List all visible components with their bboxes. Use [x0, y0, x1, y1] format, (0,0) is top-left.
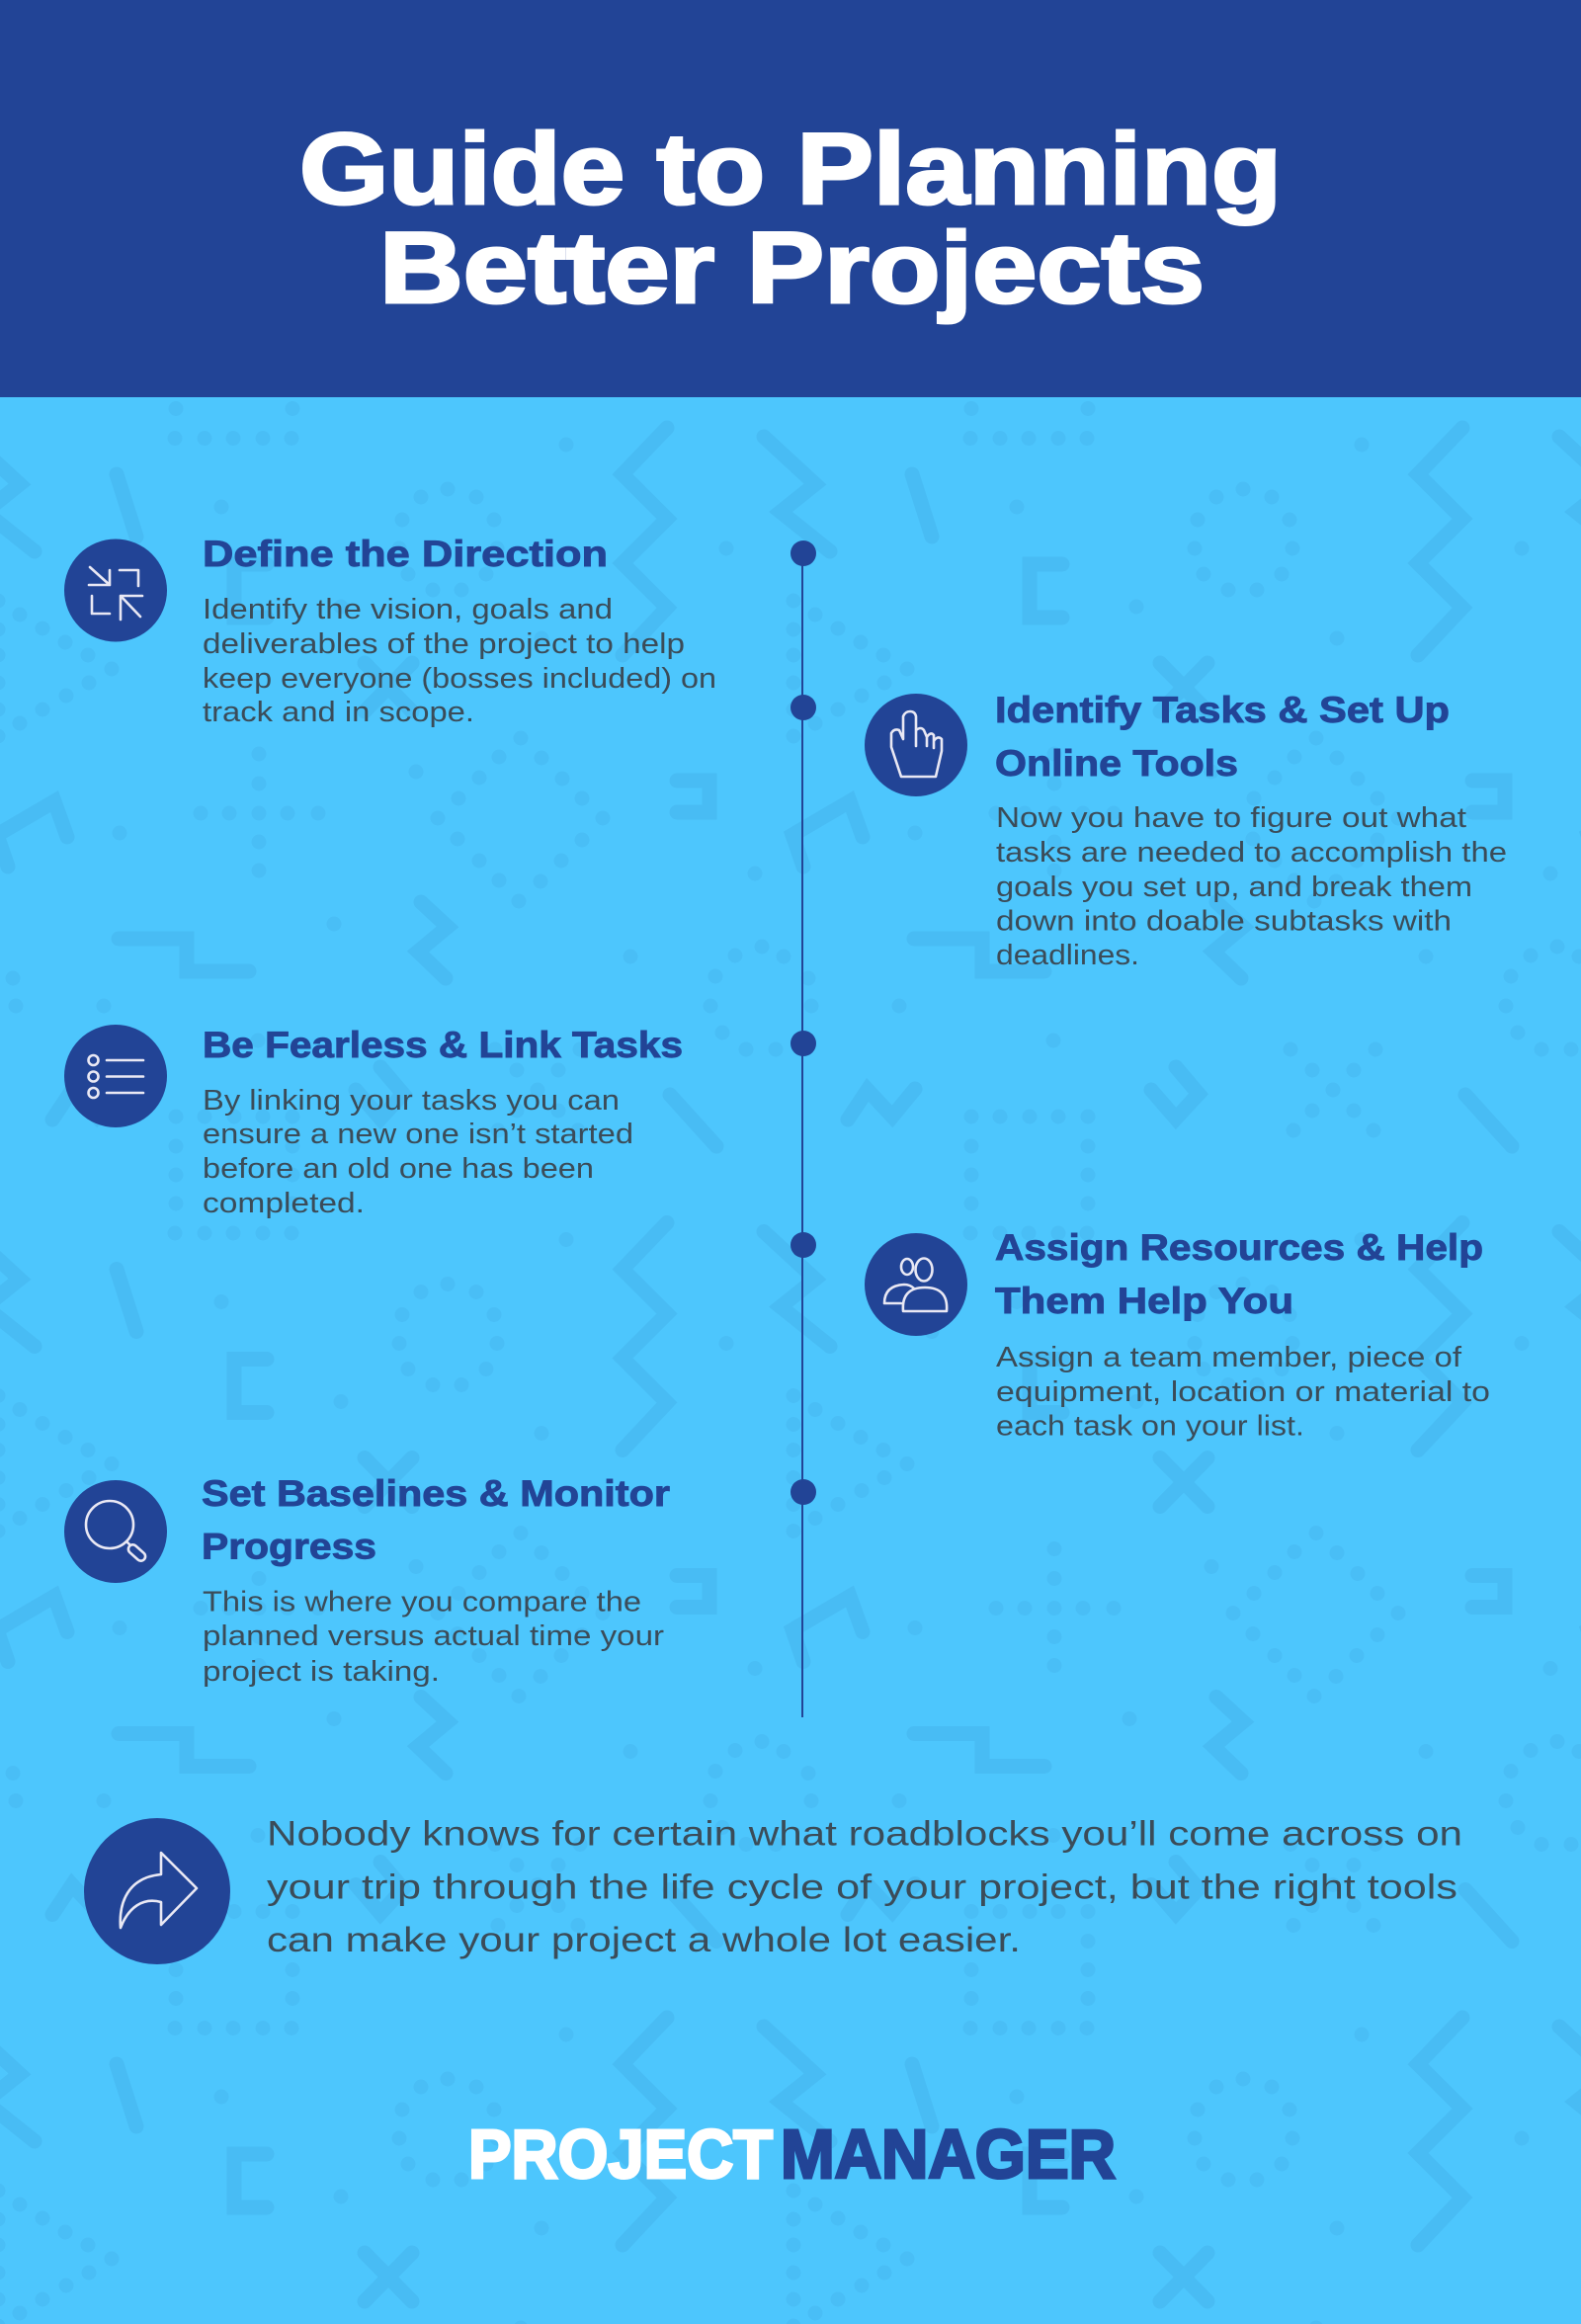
heading: Assign Resources & Help [995, 1227, 1483, 1268]
body text: Now you have to figure out what [996, 802, 1466, 834]
body text: deliverables of the project to help [203, 628, 685, 660]
timeline [790, 540, 816, 1717]
body text [203, 594, 716, 728]
body text [996, 1342, 1490, 1443]
closing text: Nobody knows for certain what roadblocks you’ll come across on [267, 1814, 1462, 1854]
logo [468, 2116, 1116, 2193]
timeline dot 4 [790, 1232, 816, 1258]
heading [995, 690, 1450, 784]
title: Guide to Planning [299, 113, 1282, 225]
body text: equipment, location or material to [996, 1376, 1490, 1408]
body text: track and in scope. [203, 697, 474, 728]
logo: MANAGER [781, 2116, 1116, 2193]
body text: before an old one has been [203, 1153, 594, 1185]
timeline dot 2 [790, 695, 816, 720]
heading: Define the Direction [203, 534, 608, 574]
panel: identify tasks [865, 690, 1507, 971]
heading: Them Help You [995, 1281, 1293, 1321]
heading: Online Tools [995, 743, 1238, 784]
title: Better Projects [379, 211, 1205, 324]
logo: PROJECT [468, 2116, 773, 2193]
title [299, 113, 1282, 324]
closing text [267, 1814, 1462, 1959]
icon: pointing hand [865, 694, 967, 796]
body text: completed. [203, 1188, 365, 1219]
body text: deadlines. [996, 940, 1139, 971]
body text: This is where you compare the [203, 1587, 641, 1618]
timeline dot 5 [790, 1479, 816, 1505]
body text: each task on your list. [996, 1411, 1304, 1443]
body text: Identify the vision, goals and [203, 594, 613, 625]
heading: Progress [202, 1526, 376, 1567]
icon: magnifier [64, 1480, 167, 1583]
body text: goals you set up, and break them [996, 872, 1472, 903]
body text: Assign a team member, piece of [996, 1342, 1462, 1373]
body text: ensure a new one isn’t started [203, 1119, 633, 1150]
panel: assign resources [865, 1227, 1490, 1443]
icon: list [64, 1025, 167, 1127]
body text: down into doable subtasks with [996, 905, 1452, 937]
panel: define the direction [64, 534, 716, 728]
panel: closing message [84, 1814, 1462, 1964]
icon: people [865, 1233, 967, 1336]
body text [996, 802, 1507, 971]
panel: set baselines [64, 1473, 670, 1688]
header band [0, 0, 1581, 397]
timeline dot 1 [790, 540, 816, 566]
icon: share arrow [84, 1818, 230, 1964]
heading [202, 1473, 670, 1567]
body text: planned versus actual time your [203, 1620, 664, 1652]
heading: Identify Tasks & Set Up [995, 690, 1450, 730]
body text [203, 1085, 633, 1219]
body text: tasks are needed to accomplish the [996, 837, 1507, 869]
icon: compress arrows [64, 540, 167, 642]
panel: be fearless [64, 1025, 683, 1219]
heading: Set Baselines & Monitor [202, 1473, 670, 1514]
timeline dot 3 [790, 1031, 816, 1056]
heading: Be Fearless & Link Tasks [203, 1025, 683, 1065]
heading [995, 1227, 1483, 1321]
body text [203, 1587, 664, 1688]
body text: By linking your tasks you can [203, 1085, 620, 1117]
closing text: your trip through the life cycle of your project, but the right tools [267, 1868, 1457, 1907]
closing text: can make your project a whole lot easier. [267, 1921, 1021, 1959]
body text: project is taking. [203, 1656, 440, 1688]
body text: keep everyone (bosses included) on [203, 663, 716, 695]
